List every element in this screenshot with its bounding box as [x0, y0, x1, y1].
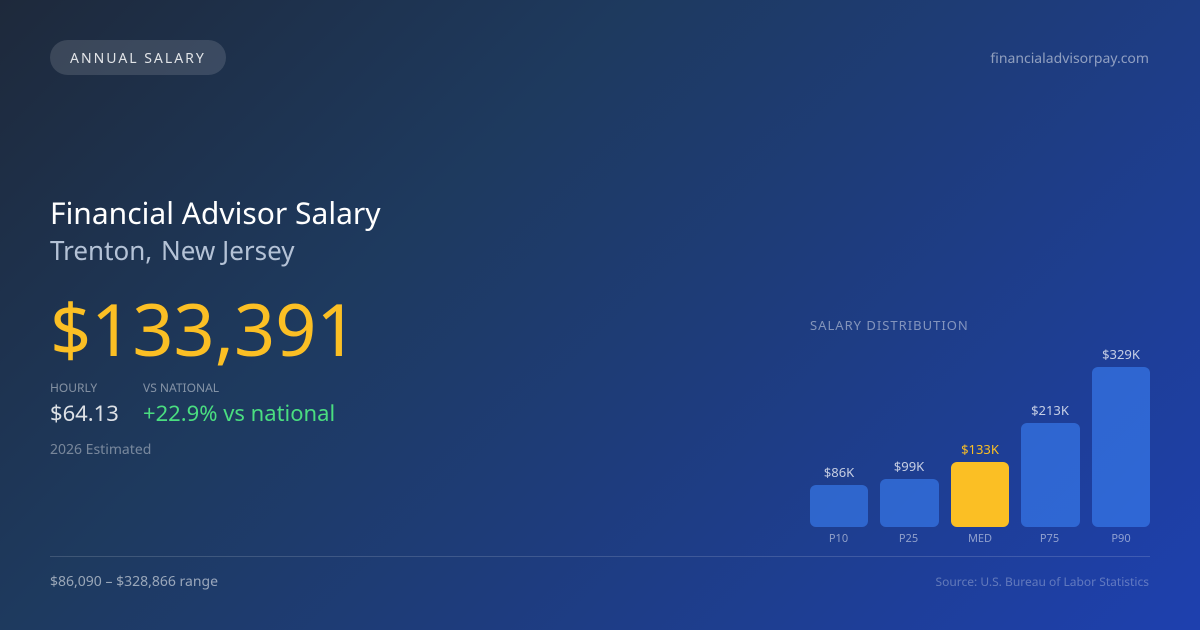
bar: P75: [1021, 401, 1080, 546]
salary range: $86,090 – $328,866 range: [50, 572, 218, 591]
source: Source: U.S. Bureau of Labor Statistics: [936, 573, 1149, 590]
bar chart: salary distribution: [810, 345, 1150, 546]
bar: P25: P25: [899, 531, 918, 546]
hourly stat: HOURLY: [50, 379, 97, 396]
estimate note: 2026 Estimated: [50, 440, 151, 459]
bar: P90: P90: [1111, 531, 1131, 546]
bar: P90: $329K: [1102, 345, 1140, 363]
badge: annual salary: ANNUAL SALARY: [70, 49, 206, 68]
bar: P10: [810, 463, 868, 546]
site domain: financialadvisorpay.com: [990, 49, 1149, 68]
bar: median: MED: [968, 531, 992, 546]
bar: P75: $213K: [1031, 401, 1069, 419]
main salary figure: $133,391: [50, 280, 358, 378]
bar: P25: $99K: [894, 457, 924, 475]
bar: median: [951, 440, 1009, 546]
chart heading: SALARY DISTRIBUTION: [810, 316, 969, 334]
bar: P10: $86K: [824, 463, 854, 481]
location subtitle: Trenton, New Jersey: [50, 232, 294, 268]
versus national stat: +22.9% vs national: [143, 398, 335, 428]
versus national stat: [143, 379, 335, 428]
bar: P10: P10: [829, 531, 848, 546]
hourly stat: $64.13: [50, 398, 119, 428]
bar: median: $133K: [961, 440, 999, 458]
bar: P90: [1092, 345, 1150, 546]
versus national stat: VS NATIONAL: [143, 379, 219, 396]
badge: annual salary: [50, 40, 226, 75]
hourly stat: [50, 379, 119, 428]
bar: P25: [880, 457, 939, 546]
bar: P75: P75: [1040, 531, 1059, 546]
title: Financial Advisor Salary: [50, 192, 381, 233]
